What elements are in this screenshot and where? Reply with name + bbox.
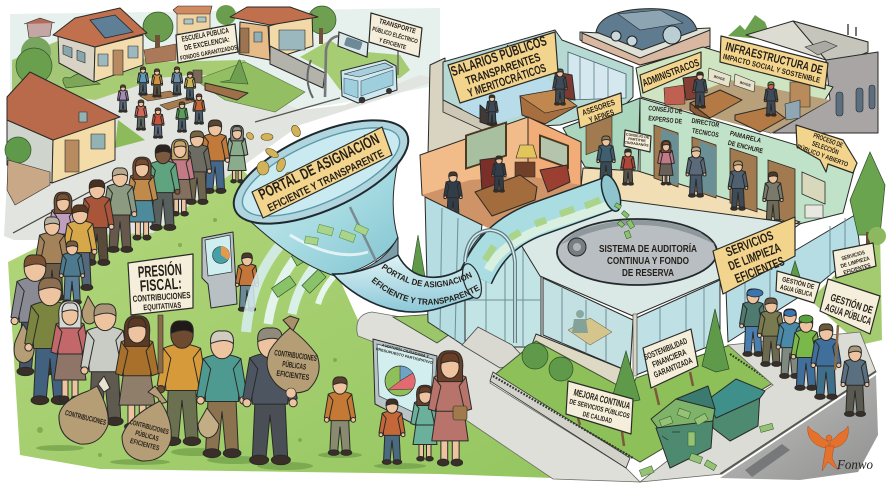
house: solar roof bbox=[53, 8, 147, 82]
pie chart poster with family bbox=[373, 339, 472, 466]
sign: escuela pública: FONDOS GARANTIZADOS bbox=[180, 44, 238, 62]
corridor back wall bbox=[640, 98, 856, 225]
people queue: rear line bbox=[35, 120, 248, 300]
sign: salarios públicos: TRANSPARENTES bbox=[464, 50, 542, 88]
icon: electric bus bbox=[341, 60, 397, 103]
trees rear bbox=[16, 5, 336, 88]
corridor floor bbox=[581, 168, 800, 248]
glass walls left bbox=[425, 197, 541, 347]
sack: contribuciones bbox=[59, 376, 110, 444]
desks bbox=[690, 90, 742, 118]
sign: presión fiscal: FISCAL: bbox=[139, 276, 182, 295]
sign: administracos bbox=[640, 52, 701, 93]
sign: infraestructura: INFRAESTRUCTURA DE bbox=[724, 39, 824, 77]
people queue: front line bbox=[11, 241, 297, 465]
sign: presión fiscal bbox=[128, 254, 193, 373]
sign: sostenibilidad financiera bbox=[642, 329, 698, 405]
child running bbox=[324, 377, 356, 455]
sign: mejora continua: MEJORA CONTINUA bbox=[572, 387, 631, 412]
sign: asesores y afines: ASESORES bbox=[581, 98, 616, 118]
round audit system: SISTEMA DE AUDITORÍA bbox=[599, 242, 697, 255]
glass wall front with lobby bbox=[530, 278, 720, 392]
tree right of building bbox=[850, 152, 886, 245]
sign: asesores y afines bbox=[577, 93, 622, 128]
house: right terracotta bbox=[230, 7, 325, 88]
dumpster closed bbox=[706, 379, 765, 441]
band: portal de asignación ribbon: PORTAL DE ASIGNACIÓN bbox=[382, 264, 472, 288]
right sidewalk and green strip bbox=[640, 230, 882, 482]
sign: servicios de limpieza: EFICIENTES bbox=[733, 253, 787, 286]
dome and top building bbox=[580, 9, 710, 65]
glass wall right bbox=[726, 215, 860, 342]
band: portal de asignación ribbon: EFICIENTE Y TRANSPARENTE bbox=[372, 277, 480, 305]
small lawn by entrance bbox=[393, 312, 463, 343]
sign: transporte público bbox=[369, 13, 422, 75]
room: corridor consejo, director, pasarela: CONSEJO DE bbox=[626, 132, 650, 140]
panel: sidewalk and plaza bbox=[357, 312, 640, 482]
room: corridor consejo, director, pasarela: CIUDADANOS bbox=[624, 140, 649, 148]
sack: contribuciones públicas eficientes: CONTRIBUCIONES bbox=[129, 419, 170, 436]
sign: transporte público: PÚBLICO ELÉCTRICO bbox=[371, 25, 419, 45]
dumpster open with money bbox=[639, 386, 774, 477]
sign: transporte público: Y EFICIENTE bbox=[378, 37, 407, 51]
wall notes bbox=[708, 68, 731, 87]
right annex building bbox=[746, 21, 878, 133]
room: corridor consejo, director, pasarela: PAMARELA bbox=[729, 130, 762, 145]
pie chart poster with family: AUDITORÍA CIUDADANA Y bbox=[381, 342, 430, 359]
band: portal de asignación ribbon bbox=[331, 236, 482, 313]
shrubs and cone trees bbox=[522, 261, 804, 402]
pie chart poster with family: PRESUPUESTO PARTICIPATIVO bbox=[376, 347, 433, 365]
sign: sostenibilidad financiera: SOSTENIBILIDAD bbox=[642, 336, 689, 362]
small sack grey side bbox=[82, 296, 97, 324]
desk bbox=[520, 90, 577, 124]
room: orange office bbox=[420, 117, 581, 228]
sign: salarios públicos bbox=[448, 31, 558, 103]
sack: carried contribuciones públicas bbox=[267, 316, 319, 398]
sign: sostenibilidad financiera: GARANTIZADA bbox=[652, 355, 694, 380]
funnel with portal banner bbox=[220, 99, 422, 276]
house: school rear bbox=[173, 6, 212, 34]
room: corridor consejo, director, pasarela: EXPERSO DE bbox=[648, 115, 683, 126]
sign: presión fiscal: CONTRIBUCIONES bbox=[132, 290, 191, 304]
room: administracos upper: IMAGE bbox=[713, 75, 726, 82]
sign: escuela pública: ESCUELA PÚBLICA bbox=[181, 26, 230, 44]
sign: salarios públicos: Y MERITOCRÁTICOS bbox=[465, 60, 548, 100]
signature: Fonwo bbox=[836, 458, 873, 473]
money stream from funnel bbox=[246, 225, 350, 332]
small sign: servicios: EFICIENTES bbox=[843, 263, 872, 276]
grass tufts and shadows bbox=[36, 208, 426, 470]
sign: proceso de selección: PÚBLICO Y ABIERTO bbox=[796, 142, 850, 169]
small sign: servicios: DE LIMPIEZA bbox=[840, 256, 871, 270]
panel: grass ground with queue bbox=[8, 167, 553, 478]
round audit system bbox=[557, 219, 717, 285]
bus stop sign and pole bbox=[307, 32, 368, 98]
sack: carried contribuciones públicas: EFICIENTES bbox=[276, 369, 310, 382]
small sign: servicios bbox=[833, 243, 876, 278]
sign: mejora continua: DE CALIDAD bbox=[582, 411, 613, 425]
sign: gestión de agua small bbox=[776, 271, 820, 303]
bills falling into audit bbox=[614, 203, 635, 239]
room: corridor consejo, director, pasarela: PARTITRE bbox=[628, 137, 647, 143]
room: salarios públicos bbox=[443, 30, 633, 135]
icon: phoenix logo bbox=[808, 426, 848, 471]
sign: infraestructura bbox=[720, 36, 828, 89]
room: corridor consejo, director, pasarela: TECNICOS bbox=[691, 128, 720, 139]
sign: infraestructura: IMPACTO SOCIAL Y SOSTENIBLE bbox=[722, 52, 821, 85]
planter lawn with hedge bbox=[490, 261, 804, 468]
icon: kiosk with pie screen bbox=[202, 232, 259, 311]
sack: contribuciones públicas eficientes: EFICIENTES bbox=[129, 438, 160, 453]
small sign consejo bbox=[624, 130, 651, 152]
sign: escuela pública bbox=[176, 24, 238, 63]
sign: gestión de agua pública large bbox=[820, 279, 880, 370]
sign: salarios públicos: SALARIOS PÚBLICOS bbox=[448, 31, 549, 79]
room: corridor consejo, director, pasarela bbox=[563, 98, 856, 248]
doors bbox=[654, 125, 795, 225]
sack: carried contribuciones públicas: PÚBLICAS bbox=[282, 359, 307, 372]
sign: sostenibilidad financiera: FINANCIERA bbox=[651, 347, 688, 370]
rear green trees bbox=[728, 15, 772, 40]
sign: administracos: ADMINISTRACOS bbox=[641, 57, 701, 90]
sack: contribuciones públicas eficientes: PÚBLICAS bbox=[134, 428, 160, 443]
left stone wall of building bbox=[428, 58, 496, 156]
pipe from funnel to audit bbox=[465, 172, 635, 343]
sign: servicios de limpieza: SERVICIOS bbox=[723, 227, 776, 259]
corridor left wall bbox=[563, 98, 640, 172]
terrace roof bbox=[515, 195, 800, 316]
sign: servicios de limpieza: DE LIMPIEZA bbox=[726, 240, 783, 273]
sign: gestión de agua small: GESTIÓN DE bbox=[781, 274, 816, 291]
room: administracos upper: IMAGE bbox=[739, 81, 752, 88]
sack: carried contribuciones públicas: CONTRIBUCIONES bbox=[274, 348, 318, 363]
funnel with portal banner: EFICIENTE Y TRANSPARENTE bbox=[266, 148, 386, 215]
small sign: servicios: SERVICIOS bbox=[841, 250, 866, 262]
sign: mejora continua bbox=[566, 381, 633, 446]
funnel rim bbox=[220, 99, 422, 245]
sign: proceso de selección: SELECCIÓN bbox=[811, 139, 840, 157]
sign: presión fiscal: EQUITATIVAS bbox=[143, 301, 182, 312]
school picnic area with kids bbox=[118, 60, 248, 138]
sign: gestión de agua small: AGUA ÚBLICA bbox=[779, 282, 814, 299]
coins bbox=[245, 124, 317, 180]
sign: mejora continua: DE SERVICIOS PÚBLICOS bbox=[568, 397, 631, 420]
sign: asesores y afines: Y AFINES bbox=[588, 108, 616, 125]
room: corridor consejo, director, pasarela: DIRECTOR bbox=[691, 118, 720, 129]
sign: transporte público: TRANSPORTE bbox=[378, 18, 417, 36]
room: administracos upper bbox=[636, 47, 833, 133]
seated officials bbox=[555, 72, 575, 100]
house: foreground left bbox=[5, 72, 120, 205]
sign: proceso de selección bbox=[796, 125, 857, 173]
sign: servicios de limpieza bbox=[713, 217, 795, 294]
framed notice bbox=[802, 172, 825, 204]
sign: presión fiscal: PRESIÓN bbox=[137, 260, 182, 282]
workers queue bbox=[740, 289, 869, 416]
wall labels: CONSEJO DE bbox=[648, 105, 683, 116]
house: rear small pink bbox=[24, 18, 55, 38]
bills bbox=[272, 245, 326, 297]
portal banner sign bbox=[252, 127, 392, 218]
entrance steps bbox=[462, 327, 528, 368]
cone tree beside glass bbox=[411, 235, 425, 277]
sack: contribuciones públicas eficientes bbox=[122, 386, 171, 461]
room: corridor consejo, director, pasarela: DE ENCHURE bbox=[727, 140, 764, 155]
panel: neighbourhood backdrop bbox=[4, 8, 440, 240]
funnel with portal banner: PORTAL DE ASIGNACIÓN bbox=[256, 130, 382, 204]
sack: small tan bbox=[198, 408, 219, 438]
sign: escuela pública: DE EXCELENCIA: bbox=[183, 35, 230, 52]
funnel glass body bbox=[238, 135, 406, 276]
round audit system: CONTINUA Y FONDO bbox=[607, 255, 689, 267]
round audit system: DE RESERVA bbox=[622, 267, 674, 279]
sign: proceso de selección: PROCESO DE bbox=[812, 132, 844, 150]
sack: contribuciones: CONTRIBUCIONES bbox=[64, 408, 107, 427]
small sack held by woman bbox=[14, 324, 34, 363]
arch over the pipe bbox=[465, 230, 515, 343]
